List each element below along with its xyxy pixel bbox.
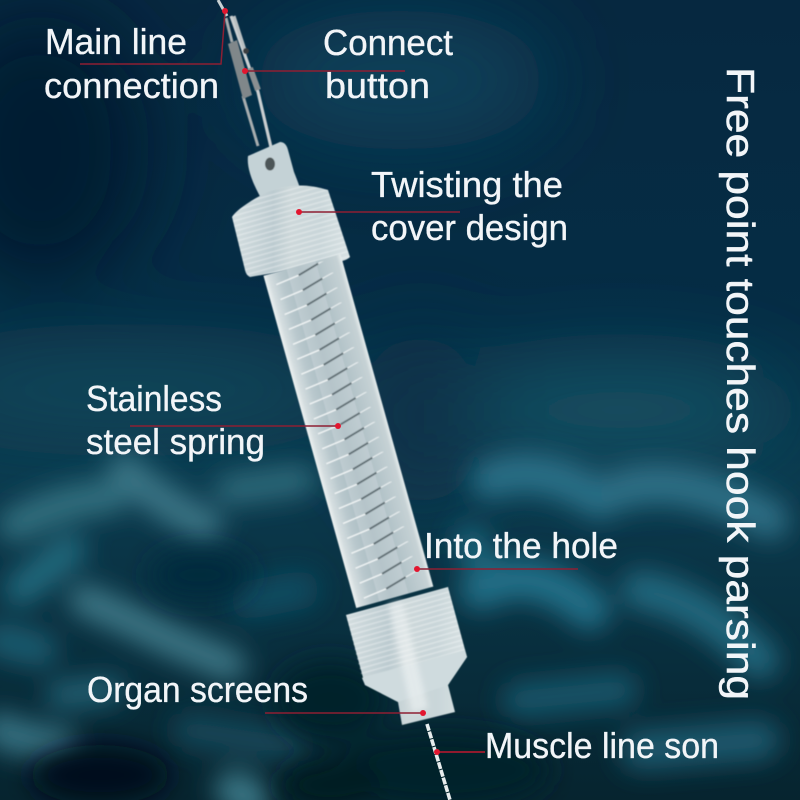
transparent tube with spring <box>263 254 433 608</box>
top cap <box>232 142 350 277</box>
callout: twisting the cover design: cover design <box>371 207 568 248</box>
callout: stainless steel spring <box>86 378 341 462</box>
lower smooth shoulder <box>362 650 467 702</box>
central frosted band <box>287 261 408 602</box>
stainless steel spring coils <box>272 258 424 601</box>
central highlight <box>388 600 428 713</box>
callout: connect button <box>242 22 453 106</box>
cap tab <box>248 142 300 200</box>
braided line below the cap <box>427 724 450 800</box>
threaded cap body <box>232 186 350 277</box>
callout: connect button: Connect <box>323 22 453 63</box>
callout: main line connection <box>44 8 228 106</box>
callout: organ screens: Organ screens <box>87 669 308 710</box>
callout: twisting the cover design <box>296 164 568 248</box>
bottom cap <box>346 587 467 725</box>
callout: into the hole: Into the hole <box>424 525 618 566</box>
callout: organ screens <box>87 669 426 716</box>
eyelet hole <box>265 158 275 170</box>
tube body <box>263 254 433 608</box>
threaded cap body <box>346 587 467 725</box>
callout: main line connection: Main line <box>45 21 187 62</box>
callout: main line connection: connection <box>44 65 219 106</box>
callout: connect button: button <box>325 65 430 106</box>
callout: muscle line son: Muscle line son <box>485 725 719 766</box>
swivel connector <box>226 16 274 160</box>
title: vertical heading: Free point touches hook parsing <box>718 67 761 700</box>
callout: stainless steel spring: steel spring <box>86 421 265 462</box>
fishing line above the swivel <box>218 0 227 16</box>
callout: twisting the cover design: Twisting the <box>371 164 563 205</box>
callout: stainless steel spring: Stainless <box>86 378 222 419</box>
